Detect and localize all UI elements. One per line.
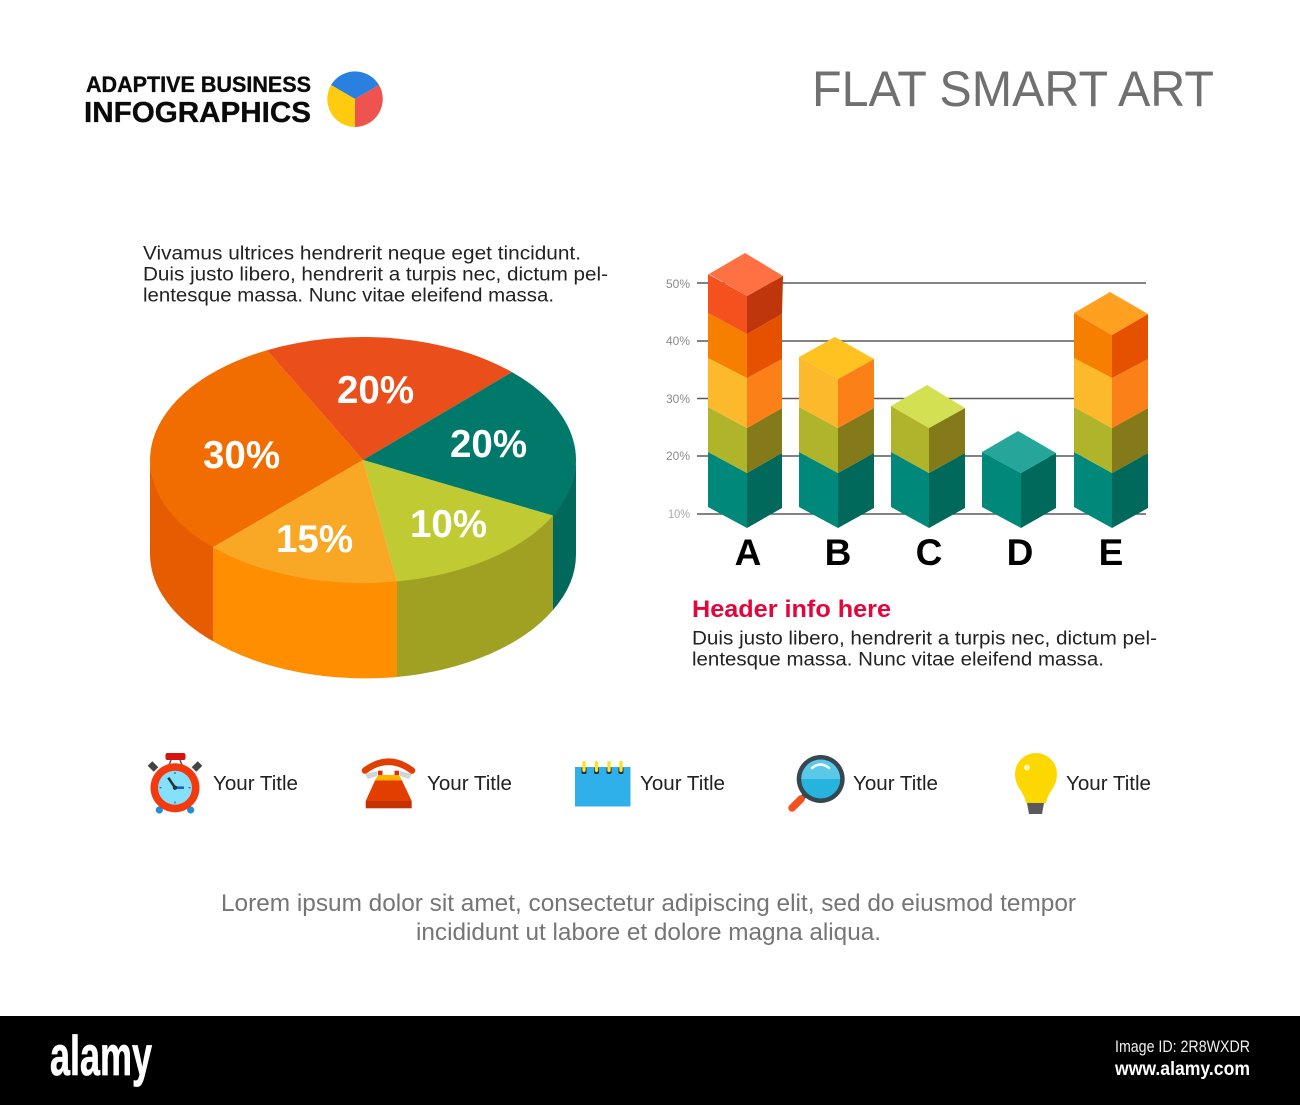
bar D [982,431,1056,528]
gridlines and axis labels: 10% [668,509,690,521]
text block: intro: Duis justo libero, hendrerit a turpis nec, dictum pel- [143,264,608,286]
bar C [891,385,965,528]
logo text: INFOGRAPHICS [84,97,311,129]
pie labels: 30% [203,434,280,477]
text block: footer note: incididunt ut labore et dolore magna aliqua. [416,919,881,946]
gridlines and axis labels: 20% [666,451,690,463]
bar E [1074,292,1148,528]
gridlines and axis labels [666,279,1146,521]
text block: intro: lentesque massa. Nunc vitae eleifend massa. [143,286,554,306]
icon: telephone [365,762,412,808]
pie labels: 20% [450,423,527,466]
bar category letters [735,532,1123,573]
gridlines and axis labels: 30% [666,394,690,406]
footer wordmark: alamy [50,1024,152,1087]
bar category letters: B [825,532,851,573]
label: your title 5: Your Title [1066,773,1151,795]
pie slice: 15% [213,460,397,583]
label: your title 2: Your Title [427,773,512,795]
pie labels: 15% [276,518,353,561]
gridlines and axis labels: 40% [666,336,690,348]
icon: notepad [575,761,630,806]
label: your title 1: Your Title [213,773,298,795]
pie slice: 10% [363,460,553,581]
pie side walls [150,459,576,678]
icon: light bulb [1015,753,1057,814]
bar category letters: A [735,532,761,573]
label: your title 4: Your Title [853,773,938,795]
3D stacked bar chart [666,253,1148,573]
label: your title 3: Your Title [640,773,725,795]
icon row [150,753,1151,814]
pie slice: 30% [150,350,363,547]
gridlines and axis labels: 50% [666,279,690,291]
title: FLAT SMART ART [812,61,1214,117]
bar B [799,337,874,528]
logo text: ADAPTIVE BUSINESS [86,72,311,97]
text block: intro [143,244,608,306]
logo pie icon [327,71,383,127]
text block: header info: lentesque massa. Nunc vitae eleifend massa. [692,650,1104,670]
site address: www.alamy.com [1114,1059,1250,1080]
text block: footer note: Lorem ipsum dolor sit amet, consectetur adipiscing elit, sed do eiusmod tempor [221,890,1076,917]
icon: magnifying glass [792,755,845,808]
3D pie chart [150,337,576,678]
text block: header info [692,628,1157,670]
pie labels [203,369,527,561]
text block: footer note [221,890,1076,946]
logo [84,71,383,129]
pie slice: 20% teal [363,372,576,516]
icon: alarm clock [150,753,200,814]
text block: intro: Vivamus ultrices hendrerit neque eget tincidunt. [143,244,581,264]
pie labels: 10% [410,503,487,546]
pie labels: 20% [337,369,414,412]
bar A [708,253,783,528]
bar category letters: C [916,532,942,573]
text block: header info: Duis justo libero, hendrerit a turpis nec, dictum pel- [692,628,1157,650]
footer band [0,1016,1300,1105]
logo text [84,72,311,129]
pie slice: 20% red [267,337,512,460]
image id: Image ID: 2R8WXDR [1115,1037,1250,1056]
bar category letters: D [1007,532,1033,573]
header info heading: Header info here [692,596,891,623]
bar category letters: E [1099,532,1123,573]
